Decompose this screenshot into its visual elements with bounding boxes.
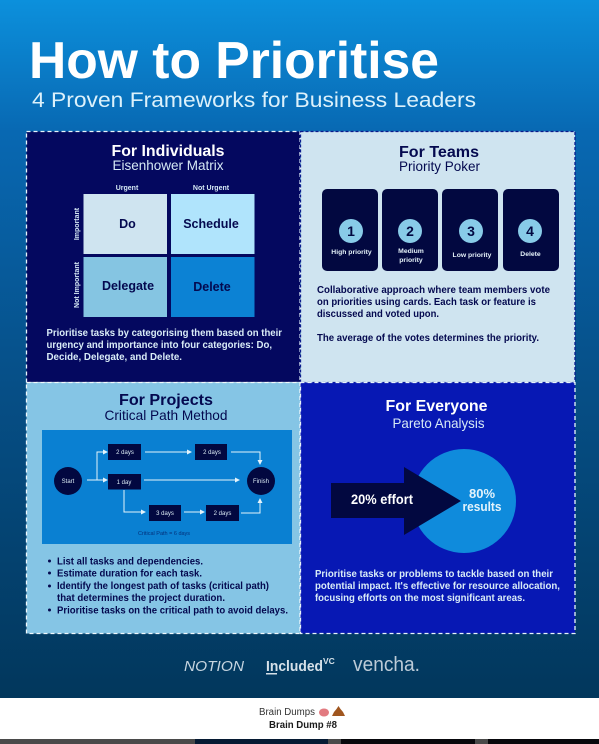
task: 2 days bbox=[108, 444, 141, 460]
title: How to Prioritise bbox=[29, 32, 439, 90]
matrix cell: schedule bbox=[171, 194, 254, 254]
circle label: 80% bbox=[469, 486, 495, 501]
node: finish bbox=[247, 467, 275, 495]
description: Decide, Delegate, and Delete. bbox=[46, 352, 182, 363]
task: 1 day bbox=[108, 474, 141, 490]
column label: urgent: Urgent bbox=[116, 185, 139, 192]
card 3: Low priority bbox=[453, 252, 492, 259]
card 2: priority bbox=[399, 257, 423, 264]
bullet list: that determines the project duration. bbox=[57, 593, 225, 604]
bullet list: Estimate duration for each task. bbox=[57, 568, 202, 580]
row label: important: Important bbox=[74, 207, 81, 240]
matrix cell: delete bbox=[171, 257, 254, 317]
critical path label: Critical Path = 6 days bbox=[138, 531, 190, 537]
bullet list: Prioritise tasks on the critical path to avoid delays. bbox=[57, 606, 288, 616]
task: 2 days bbox=[206, 505, 239, 521]
matrix cell: do bbox=[84, 194, 167, 254]
description bbox=[315, 569, 560, 604]
bullet list: List all tasks and dependencies. bbox=[57, 556, 203, 568]
icon: poop bbox=[332, 706, 345, 716]
panel: projects bbox=[26, 382, 300, 634]
description: potential impact. It's effective for resource allocation, bbox=[315, 581, 560, 592]
matrix cell: delete: Delete bbox=[193, 280, 231, 294]
task: 2 days: 2 days bbox=[203, 450, 221, 456]
matrix cell: schedule: Schedule bbox=[183, 217, 239, 231]
heading: for individuals: For Individuals bbox=[112, 143, 225, 160]
arrow label: 20% effort bbox=[351, 491, 413, 507]
bullet list: Identify the longest path of tasks (critical path) bbox=[57, 581, 269, 592]
bullet list bbox=[48, 556, 288, 616]
subheading: critical path method: Critical Path Method bbox=[104, 407, 228, 423]
task: 2 days: 2 days bbox=[116, 450, 134, 456]
matrix cell: do: Do bbox=[119, 217, 136, 231]
critical path diagram bbox=[42, 430, 292, 544]
logo: included vc: Included bbox=[266, 658, 323, 675]
card 1: 1 bbox=[347, 223, 355, 239]
card 1 bbox=[322, 189, 378, 271]
card 1: High priority bbox=[331, 249, 372, 256]
description: discussed and voted upon. bbox=[317, 309, 439, 320]
logo: vencha: vencha. bbox=[353, 654, 420, 676]
circle label: results bbox=[462, 499, 502, 514]
heading: for teams: For Teams bbox=[399, 144, 479, 161]
card 2: Medium bbox=[398, 248, 424, 255]
node: start bbox=[54, 467, 82, 495]
description: Collaborative approach where team members vote bbox=[317, 285, 550, 296]
subtitle: 4 Proven Frameworks for Business Leaders bbox=[32, 89, 476, 112]
subheading: pareto analysis: Pareto Analysis bbox=[392, 415, 484, 431]
description: Prioritise tasks or problems to tackle based on their bbox=[315, 569, 553, 580]
row label: not important: Not Important bbox=[74, 261, 81, 308]
task: 1 day: 1 day bbox=[117, 480, 131, 486]
task: 3 days bbox=[149, 505, 181, 521]
card 3 bbox=[442, 189, 498, 271]
heading: for everyone: For Everyone bbox=[386, 398, 488, 415]
heading: for projects: For Projects bbox=[119, 392, 213, 409]
matrix cell: delegate: Delegate bbox=[102, 279, 154, 293]
description: on priorities using cards. Each task or feature is bbox=[317, 297, 536, 308]
card 4 bbox=[503, 189, 559, 271]
caption title: Brain Dumps bbox=[259, 707, 315, 718]
arrowheads bbox=[103, 450, 262, 514]
card 3: 3 bbox=[467, 223, 475, 239]
column label: not urgent: Not Urgent bbox=[193, 185, 230, 192]
matrix cell: delegate bbox=[84, 257, 167, 317]
arrows bbox=[87, 452, 260, 513]
circle label bbox=[462, 486, 502, 514]
task: 2 days: 2 days bbox=[214, 511, 231, 517]
panel: everyone bbox=[300, 382, 575, 634]
panel: individuals bbox=[26, 132, 300, 382]
subheading: priority poker: Priority Poker bbox=[399, 158, 480, 174]
task: 3 days: 3 days bbox=[156, 511, 174, 517]
caption bar bbox=[0, 698, 599, 739]
description: focusing efforts on the most significant areas. bbox=[315, 593, 525, 604]
subheading: eisenhower matrix: Eisenhower Matrix bbox=[112, 157, 224, 173]
card 4: Delete bbox=[520, 251, 541, 258]
card 4: 4 bbox=[526, 223, 534, 239]
description bbox=[46, 328, 282, 363]
logo: included vc: VC bbox=[323, 656, 335, 666]
panel: teams bbox=[300, 132, 575, 382]
description bbox=[317, 285, 550, 344]
thumbnail strip bbox=[0, 739, 599, 744]
description: urgency and importance into four categories: Do, bbox=[46, 340, 272, 351]
node: start: Start bbox=[62, 479, 75, 485]
caption subtitle: Brain Dump #8 bbox=[269, 720, 337, 731]
card 2 bbox=[382, 189, 438, 271]
node: finish: Finish bbox=[253, 479, 269, 485]
pareto circle bbox=[412, 449, 516, 553]
icon: brain bbox=[319, 708, 329, 716]
description: Prioritise tasks by categorising them based on their bbox=[46, 328, 282, 339]
description: The average of the votes determines the priority. bbox=[317, 333, 539, 344]
pareto arrow bbox=[331, 467, 461, 535]
logo: notion: NOTION bbox=[184, 658, 244, 675]
card 2: 2 bbox=[406, 223, 414, 239]
task: 2 days bbox=[195, 444, 227, 460]
